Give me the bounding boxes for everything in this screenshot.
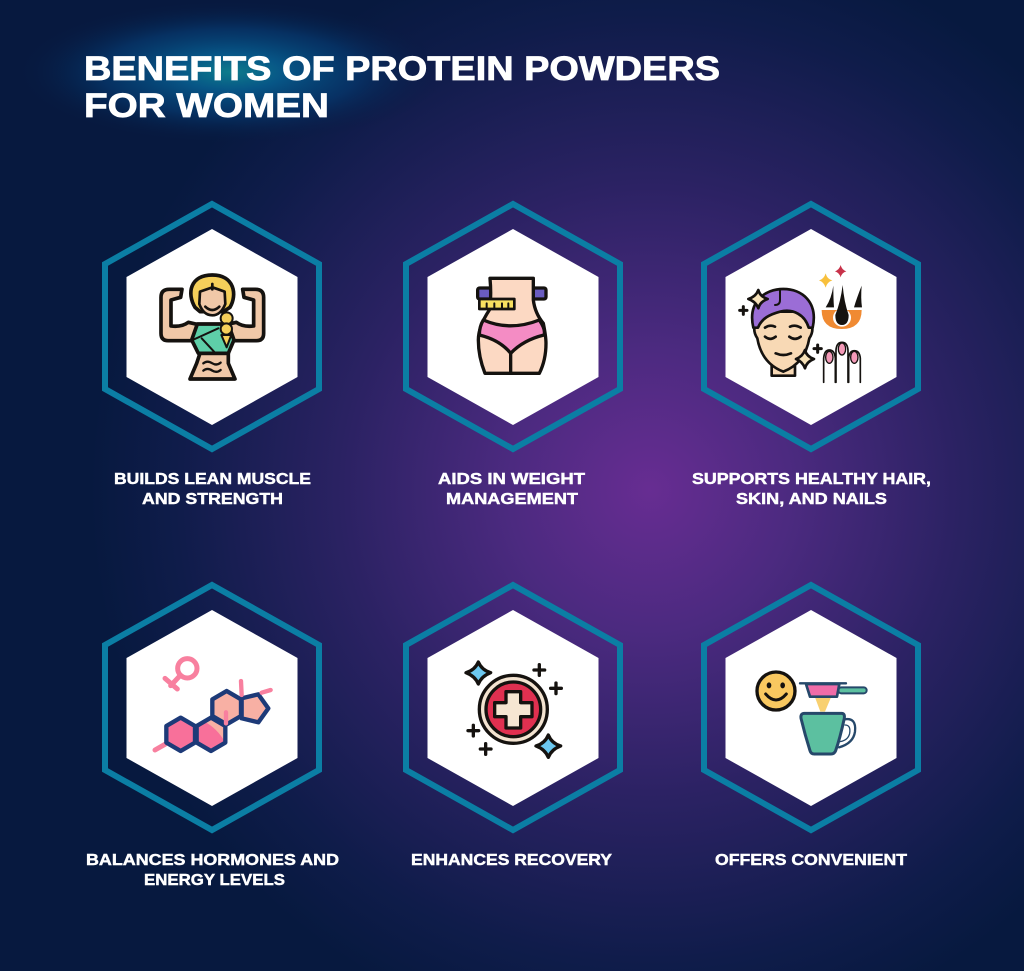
panel: builds lean muscle bbox=[105, 204, 319, 508]
hexagon frame bbox=[406, 204, 620, 449]
hexagon frame bbox=[105, 204, 319, 449]
label: AND STRENGTH bbox=[142, 491, 283, 508]
title bbox=[84, 50, 720, 125]
title: BENEFITS OF PROTEIN POWDERS bbox=[84, 50, 720, 88]
label: AIDS IN WEIGHT bbox=[438, 471, 585, 488]
icon: face, hair follicle and nails bbox=[740, 265, 862, 382]
label: ENERGY LEVELS bbox=[144, 872, 285, 889]
label bbox=[86, 852, 339, 889]
title: FOR WOMEN bbox=[84, 87, 329, 125]
hexagon frame bbox=[704, 585, 918, 830]
label bbox=[114, 471, 311, 508]
panel: offers convenient bbox=[704, 585, 918, 869]
hexagon frame bbox=[704, 204, 918, 449]
label: SKIN, AND NAILS bbox=[736, 491, 887, 508]
label: ENHANCES RECOVERY bbox=[411, 852, 612, 869]
panel: hair skin nails bbox=[692, 204, 931, 508]
panel: enhances recovery bbox=[406, 585, 620, 869]
label: OFFERS CONVENIENT bbox=[715, 852, 907, 869]
hexagon frame bbox=[406, 585, 620, 830]
icon: hormone molecule and female symbol bbox=[155, 659, 271, 751]
label: BUILDS LEAN MUSCLE bbox=[114, 471, 311, 488]
label: MANAGEMENT bbox=[446, 491, 578, 508]
label bbox=[692, 471, 931, 508]
icon: medical cross with sparkles bbox=[466, 662, 561, 757]
label: BALANCES HORMONES AND bbox=[86, 852, 339, 869]
icon: smiley, filter and mug bbox=[757, 672, 867, 754]
label bbox=[438, 471, 585, 508]
icon: muscular woman bbox=[161, 275, 264, 379]
hexagon frame bbox=[105, 585, 319, 830]
panel: balances hormones bbox=[86, 585, 339, 889]
label: SUPPORTS HEALTHY HAIR, bbox=[692, 471, 931, 488]
panel: weight management bbox=[406, 204, 620, 508]
icon: waist with measuring tape bbox=[478, 278, 546, 373]
